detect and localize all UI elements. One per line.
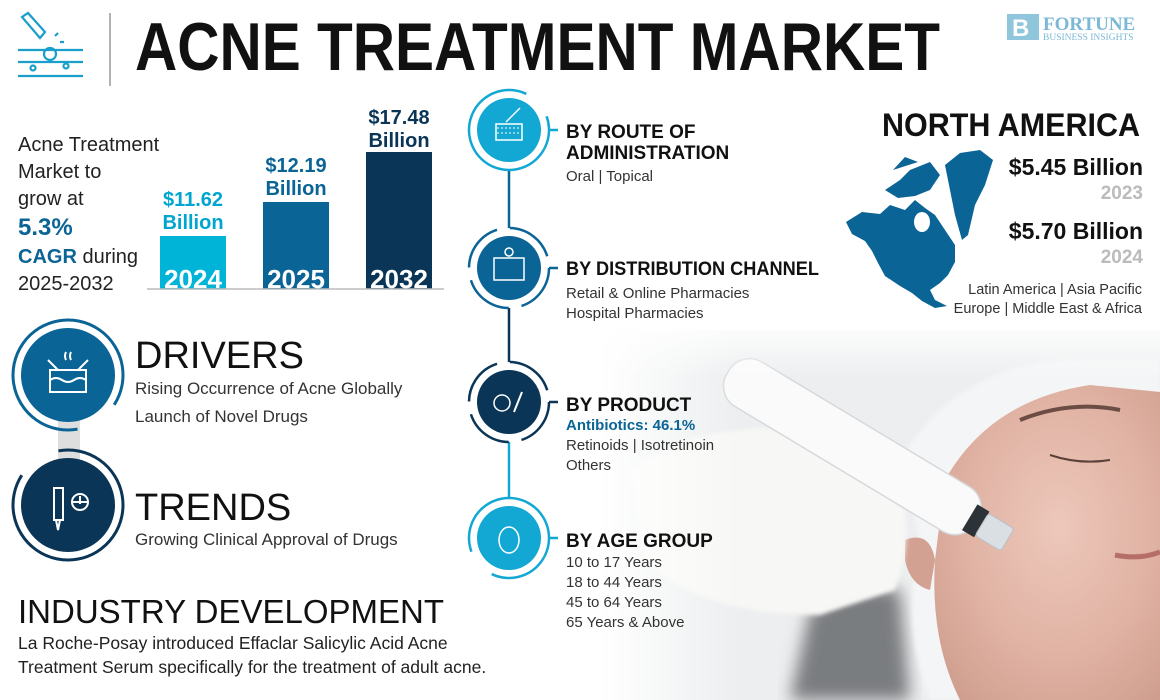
panel: north america: $5.45 Billion [1009, 154, 1143, 180]
industry development: Treatment Serum specifically for the treatment of adult acne. [18, 657, 486, 677]
bar chart: Billion [368, 130, 430, 152]
panel: north america [882, 107, 1143, 317]
title: ACNE TREATMENT MARKET [135, 9, 940, 85]
segment text: BY AGE GROUP [566, 531, 713, 552]
bar chart: Billion [162, 212, 224, 234]
panel: drivers & trends [4, 311, 403, 569]
panel: north america: NORTH AMERICA [882, 107, 1140, 143]
logo: fortune business insights [1007, 14, 1135, 43]
segment text: Retinoids | Isotretinoin [566, 437, 714, 454]
icon: distribution [469, 228, 558, 308]
industry development [18, 593, 486, 677]
heading: trends: TRENDS [135, 487, 291, 529]
bar chart: $17.48 [368, 107, 430, 129]
text block: cagr: 2025-2032 [18, 273, 114, 295]
logo: fortune business insights: B [1012, 15, 1029, 42]
segment text: 10 to 17 Years [566, 554, 662, 571]
text block: cagr: CAGR during [18, 246, 138, 268]
industry development: La Roche-Posay introduced Effaclar Salicylic Acid Acne [18, 633, 448, 653]
panel: north america: Latin America | Asia Pacific [968, 282, 1142, 298]
bar chart: $11.62 [163, 189, 223, 211]
segment text: 45 to 64 Years [566, 594, 662, 611]
panel: north america: 2024 [1101, 247, 1143, 268]
map: north america [846, 150, 993, 308]
text block: cagr [18, 134, 160, 295]
segment text [566, 122, 819, 631]
bar chart: 2032 [370, 264, 428, 294]
segment text: BY PRODUCT [566, 395, 692, 416]
panel: north america: Europe | Middle East & Africa [954, 301, 1143, 317]
industry development: INDUSTRY DEVELOPMENT [18, 593, 444, 630]
icon: route [458, 79, 560, 181]
panel: drivers & trends: Rising Occurrence of Acne Globally [135, 379, 403, 398]
icon: acne logo [18, 13, 83, 76]
bar chart: $12.19 [265, 155, 327, 177]
icon: trends [4, 441, 132, 569]
segment text: Retail & Online Pharmacies [566, 285, 749, 302]
panel: drivers & trends: Growing Clinical Approval of Drugs [135, 530, 398, 549]
segment text: Others [566, 457, 611, 474]
logo: fortune business insights: BUSINESS INSIGHTS [1043, 33, 1134, 43]
text block: cagr: Acne Treatment [18, 134, 160, 156]
bar chart: Billion [265, 178, 327, 200]
text block: cagr: grow at [18, 188, 84, 210]
logo: fortune business insights: FORTUNE [1043, 14, 1135, 35]
panel: north america: $5.70 Billion [1009, 218, 1143, 244]
segment text: Hospital Pharmacies [566, 305, 704, 322]
icon: drivers [4, 311, 132, 439]
bar chart: 2024 [164, 264, 222, 294]
segment text: Antibiotics: 46.1% [566, 417, 695, 434]
bar chart [147, 107, 444, 294]
segment text: BY DISTRIBUTION CHANNEL [566, 259, 819, 280]
photo: acne treatment [600, 320, 1160, 700]
panel: drivers & trends: Launch of Novel Drugs [135, 407, 308, 426]
text block: cagr: 5.3% [18, 214, 73, 241]
segment text: 18 to 44 Years [566, 574, 662, 591]
bar chart: 2025 [267, 264, 325, 294]
segment text: Oral | Topical [566, 168, 653, 185]
panel: north america: 2023 [1101, 183, 1143, 204]
segment text: 65 Years & Above [566, 614, 684, 631]
icon: product [469, 362, 558, 442]
segment text: BY ROUTE OF [566, 122, 696, 143]
icon: age [458, 487, 560, 589]
text block: cagr: Market to [18, 161, 101, 183]
segment text: ADMINISTRATION [566, 143, 729, 164]
segmentation timeline [458, 79, 819, 631]
divider [109, 13, 111, 86]
heading: drivers: DRIVERS [135, 335, 304, 377]
